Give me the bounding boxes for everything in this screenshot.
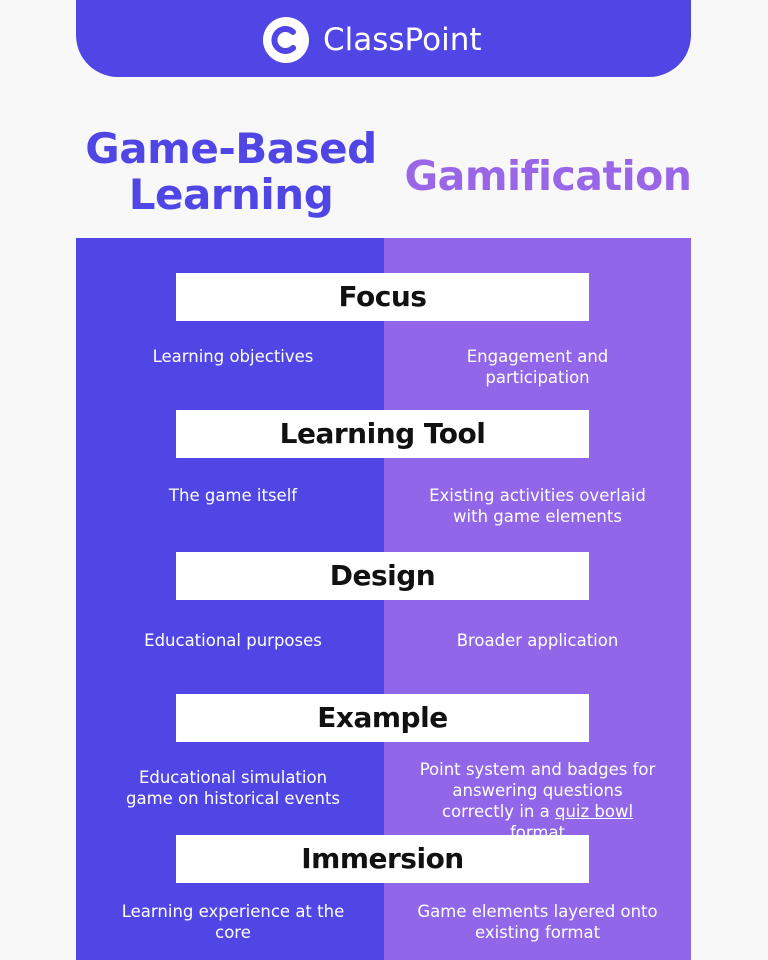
text: example left: game on historical events bbox=[126, 789, 340, 808]
heading: design: Design bbox=[330, 559, 435, 592]
header bbox=[76, 0, 691, 77]
title: gamification: Gamification bbox=[405, 152, 691, 200]
logo: ClassPoint bbox=[323, 22, 482, 58]
panel: right bbox=[384, 238, 691, 960]
text: focus right: Engagement and bbox=[467, 347, 608, 366]
heading: example bbox=[176, 694, 589, 742]
heading: immersion: Immersion bbox=[301, 842, 464, 875]
heading: learning tool bbox=[176, 410, 589, 458]
heading: learning tool: Learning Tool bbox=[280, 417, 485, 450]
text: example right: Point system and badges for bbox=[420, 760, 655, 779]
text: immersion left: core bbox=[215, 923, 251, 942]
text: immersion right bbox=[417, 902, 658, 942]
heading: focus bbox=[176, 273, 589, 321]
title: game-based learning bbox=[85, 124, 377, 219]
heading: example: Example bbox=[317, 701, 448, 734]
text: focus left: Learning objectives bbox=[153, 347, 313, 366]
text: immersion left bbox=[122, 902, 344, 942]
text: tool right: with game elements bbox=[453, 507, 622, 526]
text: tool right bbox=[429, 486, 646, 526]
text: example right: correctly in a quiz bowl bbox=[442, 802, 633, 821]
panel: left bbox=[76, 238, 384, 960]
text: example right: answering questions bbox=[452, 781, 623, 800]
text: design left: Educational purposes bbox=[144, 631, 322, 650]
text: design right: Broader application bbox=[457, 631, 618, 650]
text: example right: format bbox=[510, 823, 565, 842]
text: example left: Educational simulation bbox=[139, 768, 327, 787]
text: example right bbox=[420, 760, 656, 842]
heading: focus: Focus bbox=[339, 280, 426, 313]
text: focus right bbox=[467, 347, 608, 387]
heading: design bbox=[176, 552, 589, 600]
text: focus right: participation bbox=[485, 368, 590, 387]
text: example left bbox=[126, 768, 340, 808]
title: game-based learning: Game-Based bbox=[85, 124, 377, 173]
heading: immersion bbox=[176, 835, 589, 883]
title: game-based learning: Learning bbox=[129, 170, 333, 219]
text: tool left: The game itself bbox=[169, 486, 297, 505]
logo bbox=[263, 17, 482, 63]
text: tool right: Existing activities overlaid bbox=[429, 486, 646, 505]
text: immersion left: Learning experience at the bbox=[122, 902, 344, 921]
text: immersion right: existing format bbox=[475, 923, 600, 942]
text: immersion right: Game elements layered onto bbox=[417, 902, 658, 921]
